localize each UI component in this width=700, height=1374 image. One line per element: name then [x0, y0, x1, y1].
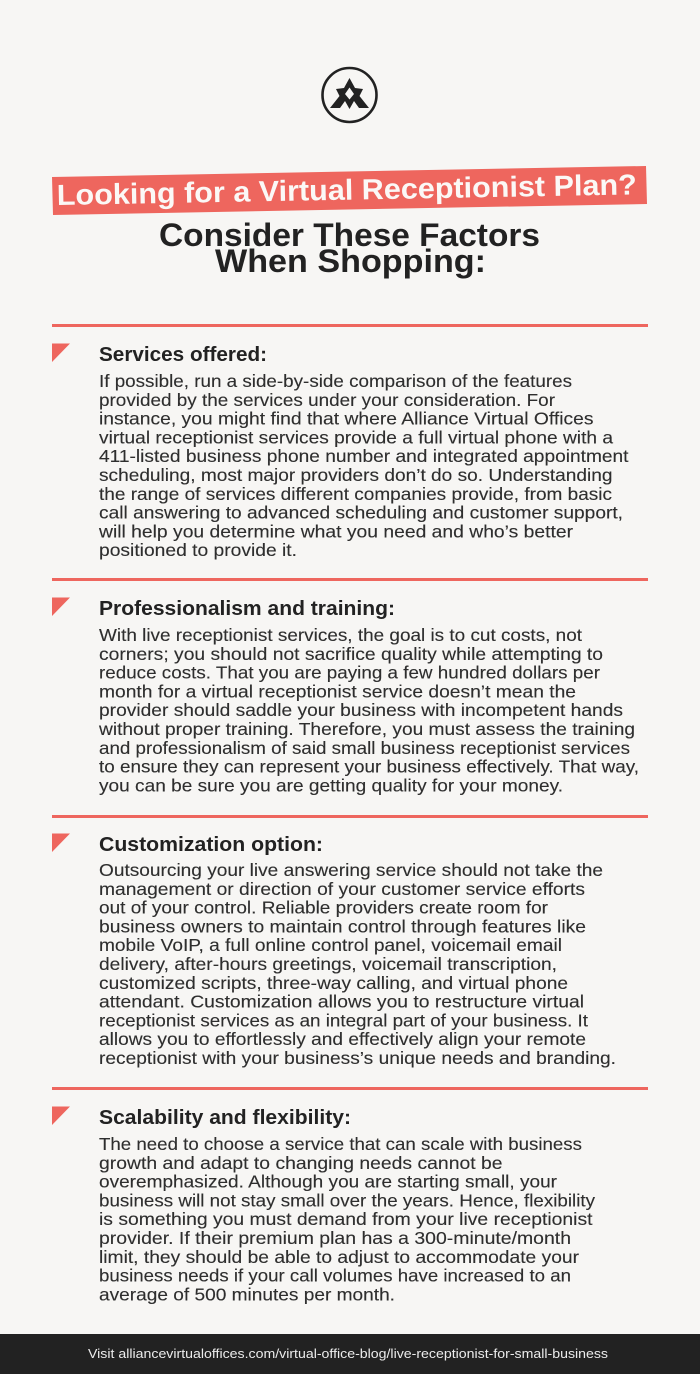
footer bar with source URL: Visit alliancevirtualoffices.com/virtual-office-blog/live-receptionist-for-small-business — [88, 1346, 609, 1361]
text block: scalability and flexibility: is something you must demand from your live receptionist — [99, 1209, 593, 1229]
panel: professionalism and training — [52, 578, 648, 795]
heading: scalability and flexibility: Scalability and flexibility: — [99, 1107, 351, 1129]
text block: scalability and flexibility: provider. If their premium plan has a 300-minute/month — [99, 1228, 571, 1248]
text block: customization option: receptionist services as an integral part of your business. It — [99, 1010, 588, 1030]
text block: customization option: attendant. Customization allows you to restructure virtual — [99, 992, 584, 1012]
text block: scalability and flexibility: business will not stay small over the years. Hence, flexibility — [99, 1190, 595, 1210]
text block: customization option: mobile VoIP, a full online control panel, voicemail email — [99, 935, 562, 955]
text block: customization option: delivery, after-hours greetings, voicemail transcription, — [99, 954, 557, 974]
text block: scalability and flexibility: The need to choose a service that can scale with business — [99, 1134, 582, 1154]
text block: professionalism and training: month for a virtual receptionist service doesn’t mean the — [99, 681, 576, 701]
title banner: Looking for a Virtual Receptionist Plan?: Looking for a Virtual Receptionist Plan? — [57, 169, 637, 212]
icon: coral triangle marker — [52, 1106, 70, 1125]
text block: professionalism and training: With live receptionist services, the goal is to cut costs, not — [99, 625, 582, 645]
text block: services offered: scheduling, most major providers don’t do so. Understanding — [99, 465, 612, 485]
icon: coral triangle marker — [52, 834, 70, 852]
text block: professionalism and training: to ensure they can represent your business effectively. That way, — [99, 757, 639, 777]
text block: scalability and flexibility: limit, they should be able to adjust to accommodate your — [99, 1247, 579, 1267]
text block: professionalism and training — [98, 625, 639, 795]
text block: services offered: 411-listed business phone number and integrated appointment — [99, 446, 629, 466]
text block: customization option: business owners to maintain control through features like — [99, 916, 586, 936]
text block: scalability and flexibility — [99, 1134, 595, 1304]
panel: services offered — [52, 324, 648, 560]
icon: circular mountain logo — [322, 68, 376, 122]
text block: services offered: If possible, run a side-by-side comparison of the features — [99, 371, 572, 391]
heading: professionalism and training: Professionalism and training: — [99, 598, 395, 620]
icon: coral triangle marker — [52, 344, 70, 362]
text block: services offered: positioned to provide it. — [99, 540, 297, 560]
text block: customization option: Outsourcing your live answering service should not take the — [99, 860, 603, 880]
text block: customization option — [99, 860, 616, 1068]
text block: services offered: the range of services different companies provide, from basic — [99, 484, 612, 504]
heading: customization option: Customization option: — [99, 834, 323, 856]
icon: coral triangle marker — [52, 598, 70, 616]
heading: Consider These Factors When Shopping — [159, 217, 540, 279]
text block: customization option: allows you to effortlessly and effectively align your remote — [99, 1029, 586, 1049]
text block: professionalism and training: without proper training. Therefore, you must assess the training — [98, 719, 635, 739]
text block: services offered — [98, 371, 629, 560]
text block: scalability and flexibility: business needs if your call volumes have increased to an — [99, 1266, 571, 1286]
text block: services offered: instance, you might find that where Alliance Virtual Offices — [99, 409, 594, 429]
heading: Consider These Factors When Shopping: When Shopping: — [215, 243, 486, 279]
text block: professionalism and training: you can be sure you are getting quality for your money. — [99, 775, 563, 795]
panel: scalability and flexibility — [52, 1087, 648, 1304]
text block: scalability and flexibility: overemphasized. Although you are starting small, your — [99, 1172, 557, 1192]
text block: customization option: customized scripts, three-way calling, and virtual phone — [99, 973, 568, 993]
text block: customization option: out of your control. Reliable providers create room for — [99, 898, 548, 918]
text block: scalability and flexibility: growth and adapt to changing needs cannot be — [99, 1153, 502, 1173]
text block: professionalism and training: corners; you should not sacrifice quality while attempting to — [99, 644, 603, 664]
heading: services offered: Services offered: — [99, 344, 267, 366]
text block: services offered: virtual receptionist services provide a full virtual phone with a — [99, 427, 613, 447]
text block: professionalism and training: and professionalism of said small business receptionist services — [99, 738, 630, 758]
panel: customization option — [52, 815, 648, 1068]
text block: services offered: call answering to advanced scheduling and customer support, — [99, 503, 623, 523]
text block: customization option: receptionist with your business’s unique needs and branding. — [99, 1048, 616, 1068]
text block: services offered: provided by the services under your consideration. For — [99, 390, 555, 410]
text block: services offered: will help you determine what you need and who’s better — [98, 521, 573, 541]
text block: professionalism and training: reduce costs. That you are paying a few hundred dollars per — [99, 663, 600, 683]
heading: Consider These Factors When Shopping: Consider These Factors — [159, 217, 540, 253]
footer bar with source URL — [0, 1334, 700, 1374]
text block: customization option: management or direction of your customer service efforts — [99, 879, 585, 899]
text block: professionalism and training: provider should saddle your business with incompetent hands — [99, 700, 623, 720]
text block: scalability and flexibility: average of 500 minutes per month. — [99, 1284, 395, 1304]
